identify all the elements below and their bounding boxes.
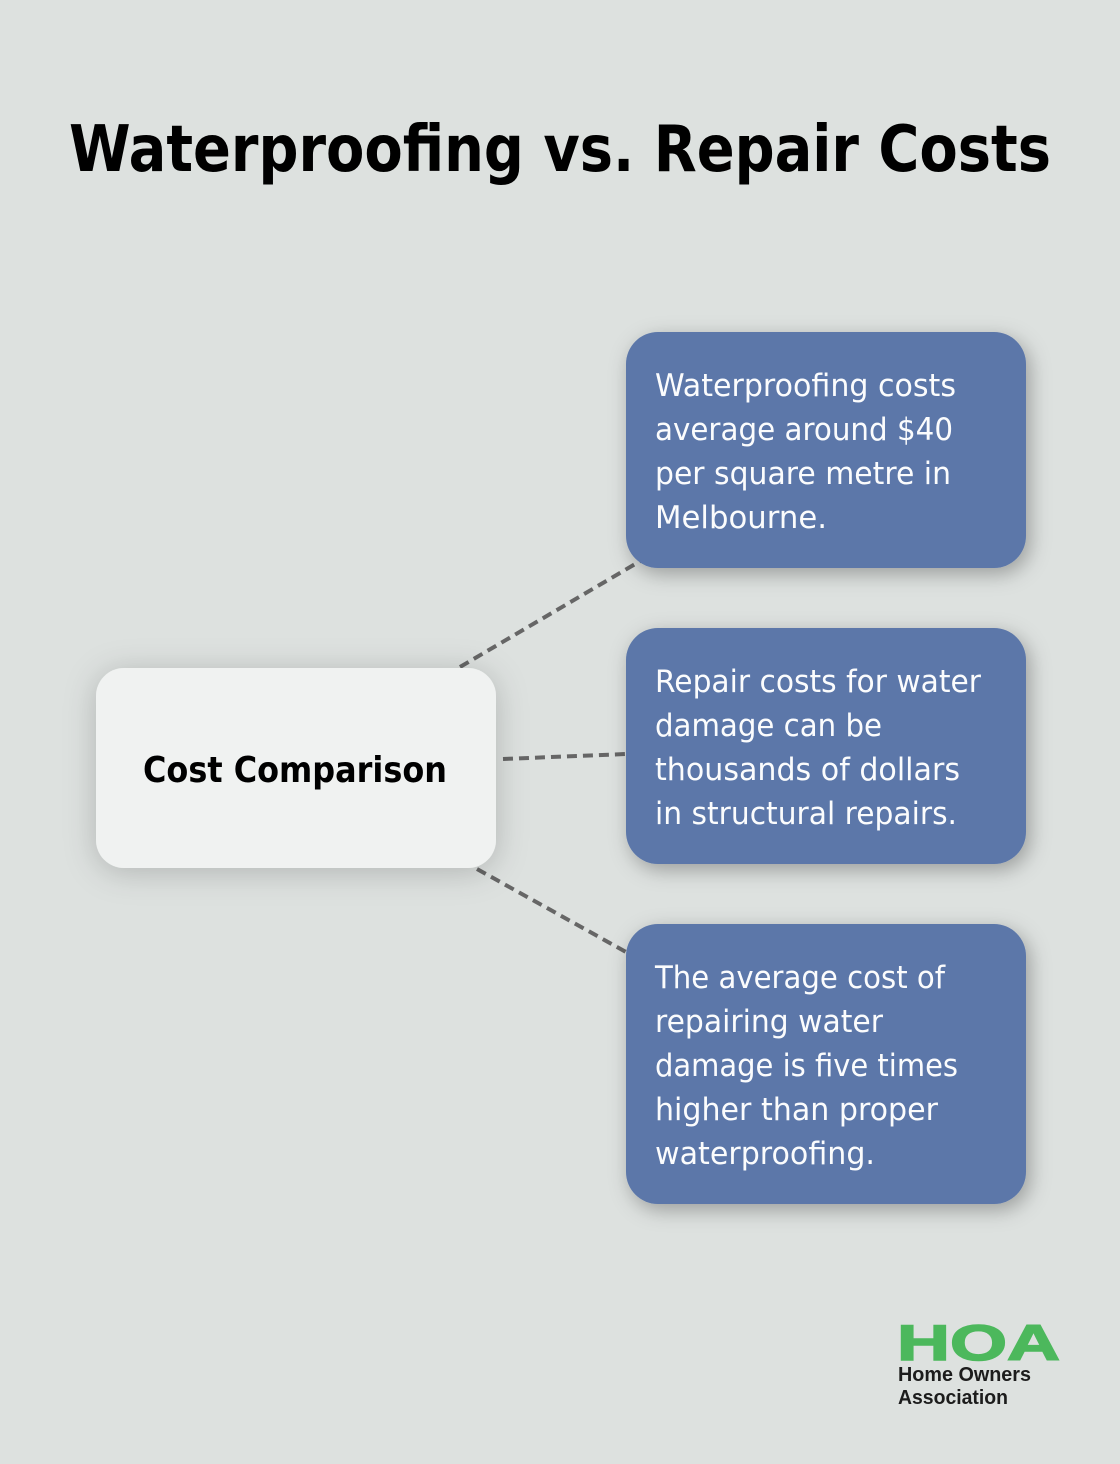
panel: five times higher: repairing water bbox=[655, 1004, 883, 1040]
panel: repair cost: Repair costs for water bbox=[655, 664, 981, 700]
logo: HOA: HOA bbox=[897, 1315, 1060, 1371]
panel: five times higher: higher than proper bbox=[655, 1092, 938, 1128]
panel: waterproofing cost: Waterproofing costs bbox=[655, 368, 956, 404]
panel: cost comparison: Cost Comparison bbox=[143, 750, 447, 791]
panel: repair cost: in structural repairs. bbox=[655, 796, 957, 832]
logo: HOA: Association bbox=[898, 1387, 1008, 1409]
panel: waterproofing cost: per square metre in bbox=[655, 456, 951, 492]
panel: repair cost bbox=[626, 628, 1026, 864]
panel: waterproofing cost bbox=[626, 332, 1026, 568]
panel: cost comparison bbox=[96, 668, 496, 868]
panel: five times higher bbox=[626, 924, 1026, 1204]
logo: HOA bbox=[897, 1315, 1060, 1409]
logo: HOA: Home Owners bbox=[898, 1364, 1031, 1386]
panel: five times higher: The average cost of bbox=[654, 960, 946, 996]
panel: waterproofing cost: average around $40 bbox=[655, 412, 953, 448]
panel: waterproofing cost: Melbourne. bbox=[655, 500, 827, 536]
panel: repair cost: damage can be bbox=[655, 708, 882, 744]
panel: five times higher: waterproofing. bbox=[655, 1136, 875, 1172]
panel: five times higher: damage is five times bbox=[655, 1048, 958, 1084]
panel: repair cost: thousands of dollars bbox=[655, 752, 960, 788]
connector lines bbox=[460, 560, 642, 952]
